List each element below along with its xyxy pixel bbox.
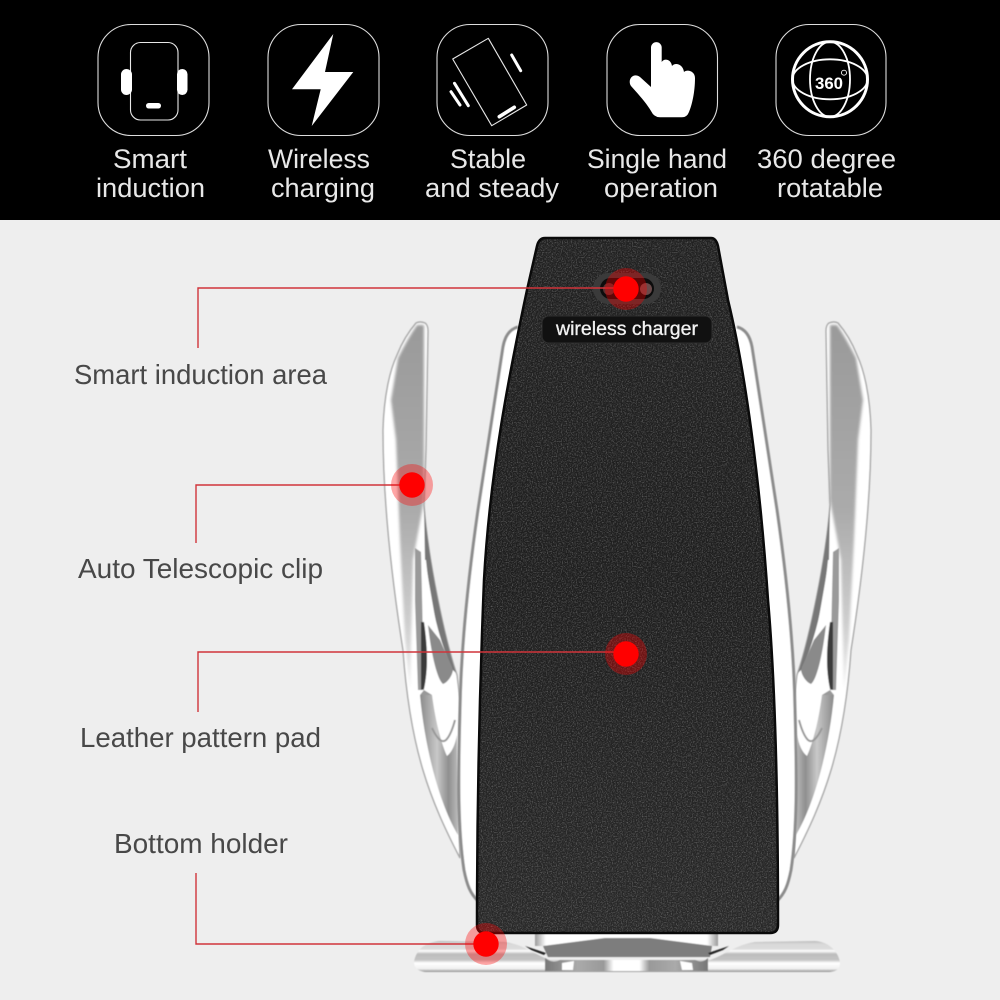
- icon: 360 globe: 360: [815, 75, 843, 93]
- icon: pointing hand: [630, 42, 695, 117]
- label: smart induction: Smart: [113, 144, 188, 174]
- label: wireless charging: Wireless: [268, 144, 370, 174]
- induction sensor window: [593, 273, 661, 304]
- product: wireless charger mount: [383, 238, 871, 972]
- callout: leather pattern pad: [80, 633, 647, 753]
- wireless charger badge: [542, 316, 712, 343]
- label: single hand operation: operation: [604, 173, 718, 203]
- feature: smart induction: [96, 24, 209, 203]
- callout: bottom holder: Bottom holder: [114, 828, 288, 859]
- wireless charger badge: wireless charger: [555, 319, 699, 340]
- label: 360 degree rotatable: rotatable: [777, 173, 883, 203]
- icon: lightning bolt: [292, 34, 353, 126]
- callout: auto telescopic clip: Auto Telescopic clip: [78, 553, 323, 584]
- right clip arm: [794, 322, 871, 858]
- icon: phone in clamp: [121, 42, 188, 120]
- feature: single hand operation: [587, 24, 727, 203]
- label: smart induction: induction: [96, 173, 205, 203]
- label: 360 degree rotatable: 360 degree: [757, 144, 896, 174]
- icon: tilted phone: [451, 38, 527, 126]
- feature: stable and steady: [425, 24, 559, 203]
- feature: 360 degree rotatable: [757, 24, 896, 203]
- callout: leather pattern pad: Leather pattern pad: [80, 722, 321, 753]
- icon: 360 globe: [792, 42, 868, 117]
- callout: smart induction area: Smart induction area: [74, 359, 328, 390]
- leather pad: [477, 238, 778, 933]
- feature: wireless charging: [268, 24, 379, 203]
- bottom holder base: [414, 932, 840, 972]
- header band: features: [0, 0, 1000, 220]
- left clip arm: [383, 322, 460, 858]
- label: wireless charging: charging: [271, 173, 375, 203]
- right rail: [725, 327, 796, 901]
- left rail: [459, 327, 530, 901]
- callout: bottom holder: [114, 828, 507, 965]
- label: stable and steady: Stable: [450, 144, 526, 174]
- callout: smart induction area: [74, 268, 647, 390]
- label: single hand operation: Single hand: [587, 144, 727, 174]
- label: stable and steady: and steady: [425, 173, 559, 203]
- callout: auto telescopic clip: [78, 464, 433, 584]
